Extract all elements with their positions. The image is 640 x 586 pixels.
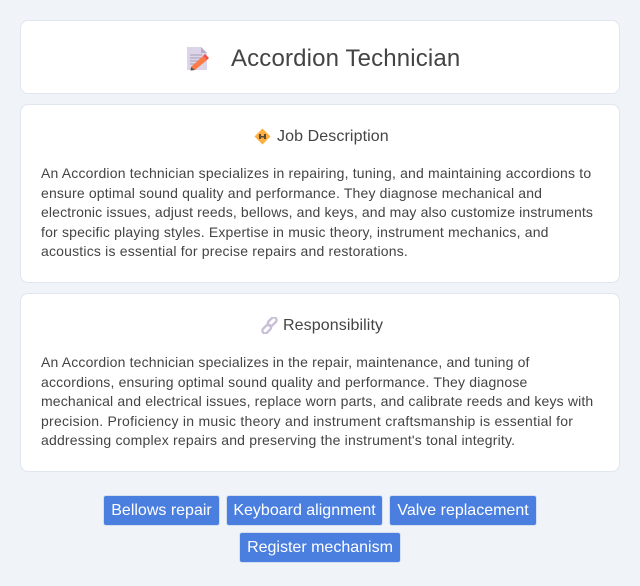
tags: [103, 495, 537, 563]
text block: responsibility: accordions, ensuring optimal sound quality and performance. They diagnose: [41, 374, 527, 390]
text block: responsibility: mechanical and electrical issues, replace worn parts, and calibrate reeds and keys with: [41, 393, 593, 409]
tag: keyboard alignment: Keyboard alignment: [233, 502, 376, 519]
text block: job description: acoustics is essential for precise repairs and restorations.: [41, 243, 408, 259]
icon: chain link: [261, 317, 278, 334]
panel: responsibility: [20, 293, 620, 472]
text block: job description: electronic issues, adjust reeds, bellows, and keys, and may also customize instruments: [41, 204, 593, 220]
title: Accordion Technician: [231, 45, 460, 72]
text block: job description: An Accordion technician specializes in repairing, tuning, and maintaining accordions to: [41, 165, 591, 181]
icon: document with pencil: [187, 47, 209, 70]
tag: valve replacement: [389, 495, 537, 526]
text block: responsibility: precision. Proficiency in music theory and instrument craftsmanship is essential for: [41, 413, 573, 429]
text block: responsibility: addressing complex repairs and preserving the instrument's tonal integrity.: [41, 432, 515, 448]
text block: job description: ensure optimal sound quality and performance. They diagnose mechanical and: [41, 185, 542, 201]
tag: register mechanism: [239, 532, 401, 563]
text block: job description: for specific playing styles. Expertise in music theory, instrument mechanics, and: [41, 224, 549, 240]
heading text: Job Description: [277, 128, 389, 145]
panel: title card: [20, 20, 620, 94]
heading text: Responsibility: [283, 317, 383, 334]
text block: responsibility: [41, 354, 593, 448]
tag: bellows repair: Bellows repair: [111, 502, 212, 519]
tag: register mechanism: Register mechanism: [247, 539, 393, 556]
panel: job description: [20, 104, 620, 283]
icon: diamond sign: [254, 128, 270, 144]
text block: responsibility: An Accordion technician specializes in the repair, maintenance, and tuning of: [41, 354, 530, 370]
text block: job description: [41, 165, 593, 259]
tag: bellows repair: [103, 495, 220, 526]
tag: keyboard alignment: [226, 495, 383, 526]
tag: valve replacement: Valve replacement: [397, 502, 529, 519]
heading: job description: [254, 128, 389, 145]
heading: responsibility: [261, 317, 383, 334]
